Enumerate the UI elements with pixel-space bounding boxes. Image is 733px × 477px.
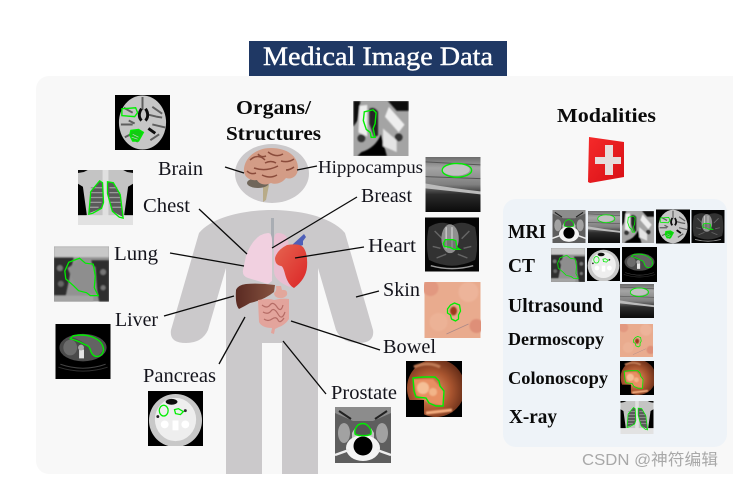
heading: organs and structures	[226, 97, 321, 145]
row: CT: CT	[508, 255, 536, 277]
organ: lungs	[243, 233, 294, 287]
label: Skin: Skin	[383, 279, 420, 301]
row: MRI: MRI	[508, 221, 546, 243]
scan: liver CT	[56, 324, 110, 379]
row: Dermoscopy	[508, 323, 655, 357]
label: Lung: Lung	[114, 243, 158, 265]
title: Medical Image Data	[263, 42, 493, 71]
leader lines	[164, 166, 380, 394]
label: Prostate: Prostate	[331, 382, 397, 404]
scan: skin dermoscopy	[422, 280, 484, 338]
scan: pancreas CT	[148, 391, 203, 447]
label: Pancreas: Pancreas	[143, 365, 216, 387]
label: Chest: Chest	[143, 195, 190, 217]
scan: heart MRI	[425, 218, 479, 272]
row: Colonoscopy: Colonoscopy	[508, 368, 608, 388]
row: Colonoscopy	[508, 360, 656, 395]
icon: red medical cross	[588, 137, 624, 183]
scan: brain	[115, 95, 170, 150]
heading: organs and structures: Structures	[226, 123, 321, 145]
label: Heart: Heart	[368, 235, 416, 257]
organ: heart	[275, 234, 307, 288]
main panel background	[36, 76, 733, 474]
row: Ultrasound: Ultrasound	[508, 295, 603, 317]
organ: stomach	[274, 286, 287, 298]
label: Hippocampus: Hippocampus	[318, 157, 423, 177]
row: Ultrasound	[508, 284, 654, 318]
panel: modalities	[503, 199, 727, 447]
row: MRI	[508, 210, 724, 244]
row: CT	[508, 247, 657, 282]
organ: bowel	[258, 299, 289, 334]
heading: modalities: Modalities	[557, 105, 656, 127]
scan: lung CT	[54, 246, 109, 302]
organ: trachea	[271, 218, 274, 248]
scan: colonoscopy	[406, 359, 465, 417]
row: Dermoscopy: Dermoscopy	[508, 329, 604, 349]
scan: hippocampus MRI	[354, 101, 408, 156]
row: X-ray	[509, 401, 654, 434]
organ: liver	[236, 284, 275, 309]
heading: organs and structures: Organs/	[236, 97, 311, 119]
watermark: CSDN @神符编辑	[582, 451, 718, 469]
label: Breast: Breast	[361, 185, 412, 207]
title	[249, 41, 507, 76]
scan: chest x-ray	[78, 170, 133, 225]
row: X-ray: X-ray	[509, 406, 557, 428]
label: Liver: Liver	[115, 309, 158, 331]
organ: brain	[244, 148, 298, 202]
scan: breast ultrasound	[426, 157, 480, 212]
scan: prostate MRI	[335, 407, 391, 463]
label: Bowel: Bowel	[383, 336, 436, 358]
label: Brain: Brain	[158, 158, 203, 180]
human body silhouette	[171, 210, 373, 474]
head outline	[235, 144, 309, 203]
